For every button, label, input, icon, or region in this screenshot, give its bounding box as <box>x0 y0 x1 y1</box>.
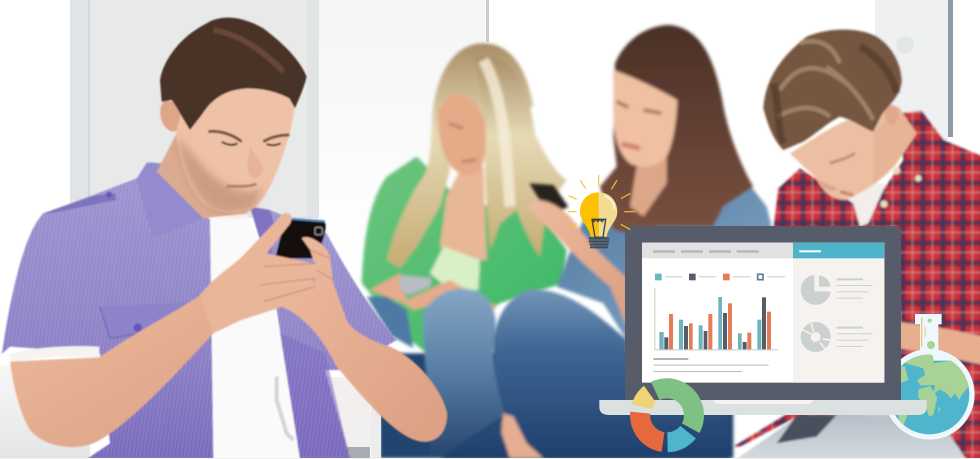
knee jean leg <box>423 289 507 457</box>
hair <box>160 18 307 130</box>
stubble <box>177 137 263 213</box>
top <box>430 247 480 290</box>
liquid ocean <box>895 354 970 434</box>
face <box>438 94 486 175</box>
chest skin <box>440 167 487 260</box>
neck shade <box>873 107 917 183</box>
hair light streak <box>483 60 510 207</box>
silver phone <box>400 275 432 295</box>
green segment <box>651 378 704 433</box>
chart legend <box>655 274 785 280</box>
phone lower edge <box>263 283 310 295</box>
neck and face <box>790 107 917 200</box>
neck <box>630 157 667 217</box>
closed eye and nose <box>830 153 855 163</box>
stripes <box>2 163 397 459</box>
right panel <box>793 243 884 383</box>
continents <box>898 354 968 425</box>
yellow segment <box>632 386 656 409</box>
orange segment <box>630 412 664 452</box>
header right <box>793 243 884 258</box>
left jean leg <box>367 297 413 348</box>
laptop notch <box>713 400 813 404</box>
sleeve hem <box>8 346 99 362</box>
donut chart <box>802 323 872 350</box>
left hand <box>200 213 319 333</box>
hair <box>763 30 902 150</box>
hair crown and left lock <box>387 43 533 268</box>
person: man in purple shirt with smartphone <box>2 18 447 459</box>
laptop <box>599 226 927 415</box>
eyes and lips <box>617 102 662 113</box>
right hand and forearm <box>280 237 447 442</box>
shirt lower tint <box>280 333 350 459</box>
dark denim base <box>380 353 733 458</box>
nose shade <box>247 147 263 178</box>
epaulette <box>43 193 117 213</box>
bar chart <box>654 288 778 350</box>
green jacket <box>362 157 567 353</box>
icon: donut pie <box>630 378 704 452</box>
flask bulb <box>884 349 975 440</box>
header left <box>642 243 793 258</box>
neck <box>157 133 263 218</box>
finger lines <box>260 250 333 302</box>
chart caption lines <box>653 358 769 372</box>
flask dots and marks <box>927 341 935 349</box>
light rays <box>568 175 635 230</box>
bottom edge strip <box>0 458 980 459</box>
face <box>613 70 677 167</box>
plaid shirt lower <box>733 343 980 459</box>
screen <box>642 243 884 383</box>
bulb left half <box>580 192 599 237</box>
ear <box>160 100 187 132</box>
denim jacket <box>557 177 773 340</box>
lips <box>840 192 853 195</box>
hand on knee <box>502 413 543 458</box>
black phone <box>529 183 568 217</box>
teal segment <box>667 426 696 452</box>
chair <box>328 377 381 458</box>
person: young man in red plaid shirt <box>733 30 980 459</box>
hair highlight <box>213 30 283 72</box>
white undershirt <box>850 183 887 227</box>
long hair <box>600 25 753 233</box>
t-shirt fold shadows <box>277 377 293 440</box>
purple shirt left <box>2 162 213 459</box>
person: blonde woman in green jacket <box>362 43 733 458</box>
person: brunette woman in denim jacket <box>440 25 773 458</box>
pie chart <box>801 275 872 305</box>
hair highlights <box>777 41 873 120</box>
hand and forearm <box>527 200 627 327</box>
eyes and lips <box>448 123 477 162</box>
laptop lid <box>625 226 901 401</box>
hair right lock <box>475 55 567 257</box>
collar <box>137 163 207 239</box>
ear <box>885 105 898 125</box>
icon: light bulb <box>568 175 635 248</box>
left arm <box>10 287 283 447</box>
laptop base <box>599 400 927 415</box>
bulb right half <box>599 192 617 237</box>
raised knee jeans <box>440 289 730 458</box>
bare forearm <box>897 322 980 365</box>
hand and lap phone <box>370 273 497 313</box>
bulb base <box>589 237 609 248</box>
shadow under laptop <box>777 415 837 443</box>
mouth <box>227 184 257 187</box>
icon: globe flask <box>884 314 975 440</box>
eyebrows <box>208 131 289 142</box>
purple shirt right <box>250 207 397 459</box>
bulb highlight <box>605 196 615 209</box>
shirt buttons <box>880 167 922 208</box>
plaid shirt upper <box>773 111 980 340</box>
flask neck <box>915 314 942 353</box>
light jeans <box>735 415 967 459</box>
phone <box>275 218 326 258</box>
pocket flap <box>100 302 212 338</box>
filament <box>592 219 606 237</box>
eyes <box>222 142 281 145</box>
face <box>176 83 297 213</box>
white t-shirt <box>190 213 300 459</box>
